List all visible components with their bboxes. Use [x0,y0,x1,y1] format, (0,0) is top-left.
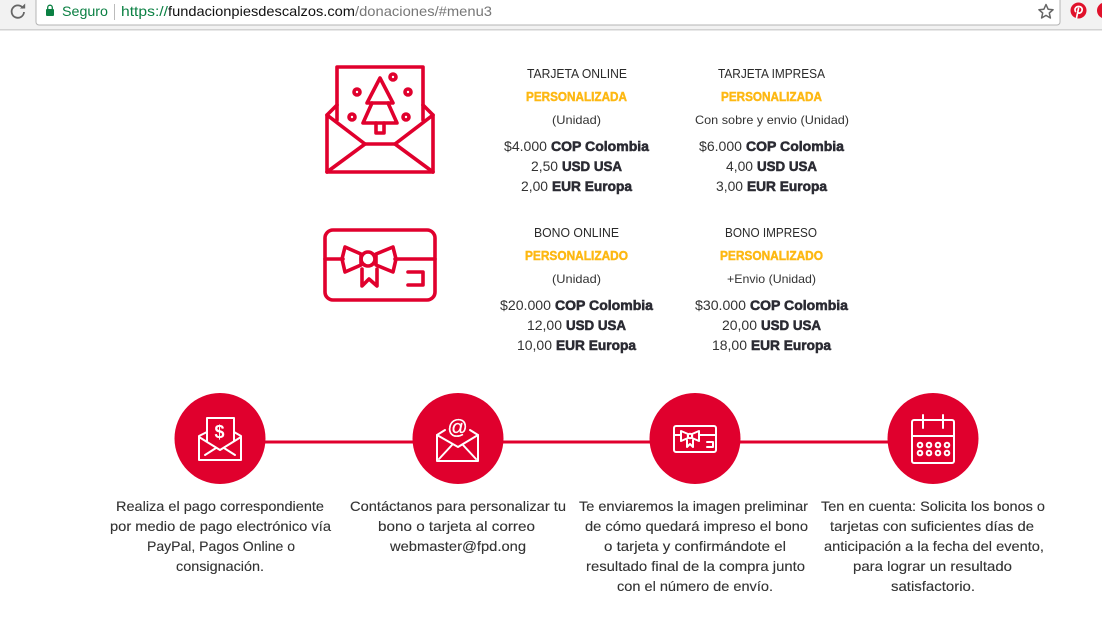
step 4 text: tarjetas con suficientes días de [830,518,1034,534]
icon: pinterest [1070,2,1086,18]
url scheme: https:// [121,3,168,19]
step 1 text: PayPal, Pagos Online o [147,538,295,554]
panel: bono impreso: EUR Europa [751,337,831,353]
panel: tarjeta impresa: 4,00 [726,158,753,174]
step 3 text: o tarjeta y confirmándote el [604,538,786,554]
panel: tarjeta online: PERSONALIZADA [526,90,627,104]
panel: bono impreso: COP Colombia [750,297,848,313]
step 2 text: bono o tarjeta al correo [378,518,535,534]
panel: bono online: USD USA [566,317,626,333]
panel: tarjeta impresa: PERSONALIZADA [721,90,822,104]
panel: bono online [500,226,653,353]
url path: /donaciones/#menu3 [355,3,492,19]
step 1 text: Realiza el pago correspondiente [116,498,324,514]
step 3 text: resultado final de la compra junto [586,558,805,574]
panel: tarjeta online: $4.000 [504,138,547,154]
step 1 text: por medio de pago electrónico vía [110,518,331,534]
step 3 text: Te enviaremos la imagen preliminar [579,498,808,514]
step 3 text: de cómo quedará impreso el bono [585,518,808,534]
panel: tarjeta impresa: COP Colombia [746,138,844,154]
panel: tarjeta impresa: TARJETA IMPRESA [718,67,826,81]
step 4 text: satisfactorio. [891,578,975,594]
panel: tarjeta impresa: EUR Europa [747,178,827,194]
panel: bono online: BONO ONLINE [534,226,619,240]
panel: bono online: 12,00 [527,317,562,333]
step 2 text: Contáctanos para personalizar tu [350,498,566,514]
step 1 text [110,498,331,574]
panel: tarjeta online: COP Colombia [551,138,649,154]
step 4 text: para lograr un resultado [853,558,1012,574]
step 3 icon: gift card [650,393,740,484]
step 4 text [821,498,1045,594]
step 2 icon: email envelope: @ [447,417,468,439]
step 4 text: anticipación a la fecha del evento, [824,538,1044,554]
panel: tarjeta online: EUR Europa [552,178,632,194]
panel: bono online: COP Colombia [555,297,653,313]
panel: tarjeta online: (Unidad) [552,113,601,127]
panel: bono online: $20.000 [500,297,551,313]
panel: bono impreso: BONO IMPRESO [725,226,817,240]
panel: tarjeta impresa: Con sobre y envio (Unidad) [695,113,849,127]
panel: tarjeta online: USD USA [562,158,622,174]
panel: bono impreso: 18,00 [712,337,747,353]
panel: tarjeta online: 2,50 [531,158,558,174]
icon: lock [46,5,54,16]
step 3 text [579,498,808,594]
secure label: Seguro [62,3,108,19]
panel: tarjeta impresa: 3,00 [716,178,743,194]
step 4 icon: calendar [888,393,978,484]
icon: star [1039,4,1053,18]
step 3 text: con el número de envío. [617,578,773,594]
panel: bono impreso: USD USA [761,317,821,333]
panel: tarjeta online: 2,00 [521,178,548,194]
icon: clipped extension [1097,2,1102,18]
panel: bono online: PERSONALIZADO [525,249,628,263]
panel: bono online: EUR Europa [556,337,636,353]
step 2 text [350,498,566,554]
step 1 icon: payment envelope: $ [214,422,225,442]
panel: bono impreso [695,226,848,353]
step 4 text: Ten en cuenta: Solicita los bonos o [821,498,1045,514]
browser toolbar [0,0,1102,30]
icon: envelope with christmas card [327,67,433,172]
panel: bono online: 10,00 [517,337,552,353]
timeline connector [220,440,933,444]
panel: bono impreso: +Envio (Unidad) [727,272,816,286]
step 2 icon: email envelope [412,393,504,484]
icon: reload [12,4,25,18]
panel: tarjeta impresa: $6.000 [699,138,742,154]
panel: tarjeta online [504,67,649,194]
url domain: fundacionpiesdescalzos.com [168,3,355,19]
step 1 text: consignación. [176,558,264,574]
panel: tarjeta impresa [695,67,849,194]
panel: tarjeta impresa: USD USA [757,158,817,174]
panel: bono online: (Unidad) [552,272,601,286]
panel: bono impreso: $30.000 [695,297,746,313]
step 2 text: webmaster@fpd.ong [389,538,526,554]
panel: bono impreso: 20,00 [722,317,757,333]
icon: gift card with bow [325,230,435,300]
panel: bono impreso: PERSONALIZADO [720,249,823,263]
step 1 icon: payment envelope [174,393,266,484]
panel: tarjeta online: TARJETA ONLINE [527,67,627,81]
